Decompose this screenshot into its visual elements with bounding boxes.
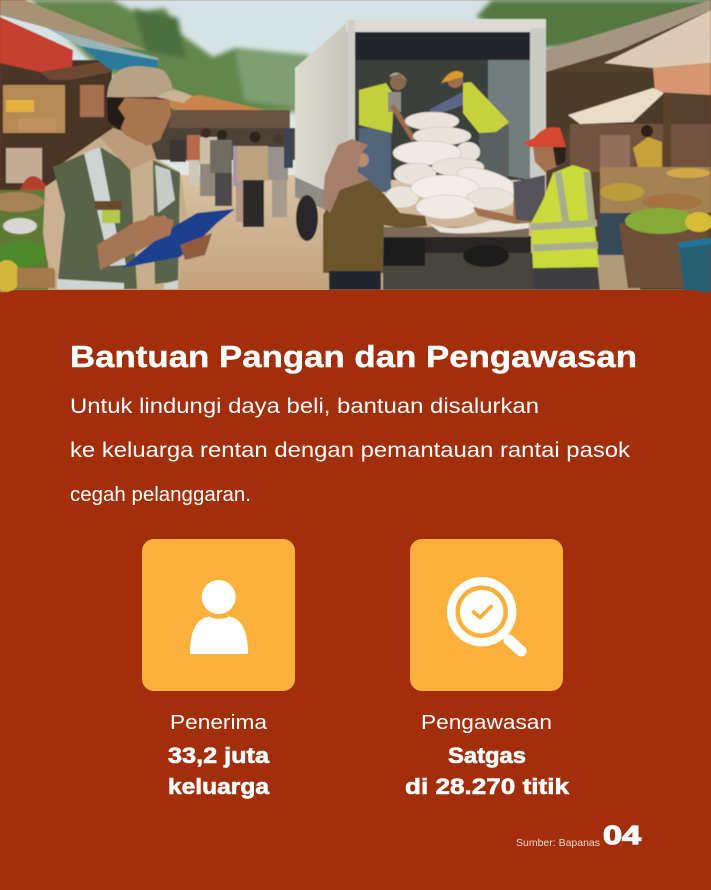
stacked white sacks: [385, 112, 529, 233]
truck body: [295, 19, 546, 290]
value: satgas di 28.270 titik: Satgas: [448, 743, 526, 768]
left market stalls: [0, 0, 290, 292]
worker in safety vest: [473, 127, 599, 290]
value: 33,2 juta keluarga: 33,2 juta: [168, 743, 270, 768]
crowd in market street: [112, 128, 295, 227]
intro paragraph: ke keluarga rentan dengan pemantauan rantai pasok: [70, 439, 631, 462]
card: penerima: [142, 539, 295, 799]
intro paragraph: [70, 395, 631, 506]
value: 33,2 juta keluarga: [168, 743, 270, 799]
right market stalls: [546, 0, 711, 292]
value: satgas di 28.270 titik: di 28.270 titik: [405, 774, 570, 799]
source note: Sumber: Bapanas: [516, 837, 600, 849]
icon: person: [142, 539, 295, 691]
content panel: [0, 290, 711, 890]
label: pengawasan: Pengawasan: [421, 712, 552, 734]
inspector with clipboard: [43, 66, 235, 289]
workers on truck: [359, 71, 509, 192]
label: penerima: Penerima: [170, 712, 268, 734]
value: satgas di 28.270 titik: [405, 743, 570, 799]
photo background: sky, hills and ground: [0, 0, 711, 292]
photo: market scene with food aid truck: [0, 0, 711, 292]
woman in hijab: [322, 139, 427, 290]
intro paragraph: Untuk lindungi daya beli, bantuan disalurkan: [70, 395, 539, 418]
card: pengawasan: [405, 539, 570, 799]
page number: 04: [603, 820, 642, 850]
title: Bantuan Pangan dan Pengawasan: [70, 340, 637, 374]
intro paragraph: cegah pelanggaran.: [70, 484, 251, 506]
icon: magnifier with check: [410, 539, 563, 691]
value: 33,2 juta keluarga: keluarga: [168, 774, 270, 799]
